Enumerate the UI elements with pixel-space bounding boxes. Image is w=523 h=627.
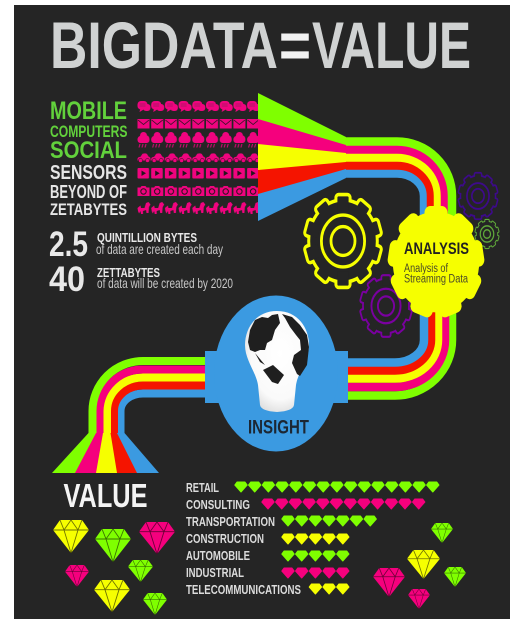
industry labels: AUTOMOBILE <box>186 549 250 563</box>
gems: left cluster <box>53 520 175 615</box>
statistic: 2.5 quintillion bytes <box>49 225 223 264</box>
data streams from insight to value <box>92 361 210 434</box>
input funnel <box>258 93 346 221</box>
industry labels: TRANSPORTATION <box>186 515 275 529</box>
gear: top right purple <box>459 174 497 218</box>
gems: right cluster <box>373 523 466 609</box>
statistic: 40 zettabytes <box>49 260 233 299</box>
gem bar: consulting <box>262 499 425 509</box>
gem bar: construction <box>282 534 349 544</box>
industry labels <box>186 481 301 597</box>
analysis description <box>404 263 468 286</box>
analysis description: Analysis of <box>404 263 449 275</box>
industry labels: CONSTRUCTION <box>186 532 264 546</box>
industry labels: INDUSTRIAL <box>186 566 244 580</box>
title: BIGDATA <box>50 8 278 82</box>
insight label: INSIGHT <box>248 418 309 438</box>
statistic: 2.5 quintillion bytes: 2.5 <box>49 225 88 264</box>
title: = <box>279 8 311 82</box>
industry labels: RETAIL <box>186 481 219 495</box>
title <box>50 8 471 82</box>
gem bar: retail <box>235 482 439 492</box>
gear: large yellow outline <box>306 196 380 286</box>
icon rows <box>137 101 258 214</box>
insight badge <box>205 296 348 452</box>
analysis gear <box>387 206 485 319</box>
output funnel <box>52 433 159 473</box>
gear: small green <box>475 220 499 248</box>
data streams to analysis <box>346 142 452 240</box>
gear: lower purple <box>361 276 411 336</box>
icon: globe light bulb <box>245 311 309 412</box>
gem bar: industrial <box>282 568 349 578</box>
data source labels <box>50 97 128 219</box>
statistic: 40 zettabytes: ZETTABYTES <box>97 265 160 280</box>
statistic: 2.5 quintillion bytes: QUINTILLION BYTES <box>97 230 197 245</box>
data source labels: SOCIAL <box>50 137 127 164</box>
gem bar: telecommunications <box>309 584 349 594</box>
analysis heading: ANALYSIS <box>404 239 469 258</box>
statistic: 40 zettabytes: 40 <box>49 260 85 299</box>
data source labels: COMPUTERS <box>50 123 128 141</box>
industry labels: TELECOMMUNICATIONS <box>186 583 301 597</box>
data source labels: BEYOND OF <box>50 182 127 202</box>
data streams from analysis to insight <box>340 290 452 396</box>
analysis description: Streaming Data <box>404 274 468 286</box>
gem bar: transportation <box>282 516 376 526</box>
data source labels: MOBILE <box>50 97 127 125</box>
gem bar: automobile <box>282 551 349 561</box>
data source labels: SENSORS <box>50 162 127 184</box>
value heading: VALUE <box>64 477 148 514</box>
data source labels: ZETABYTES <box>50 200 127 219</box>
statistic: 2.5 quintillion bytes: of data are created each day <box>96 241 223 257</box>
industry labels: CONSULTING <box>186 498 250 512</box>
statistic: 40 zettabytes: of data will be created by 2020 <box>97 275 233 291</box>
